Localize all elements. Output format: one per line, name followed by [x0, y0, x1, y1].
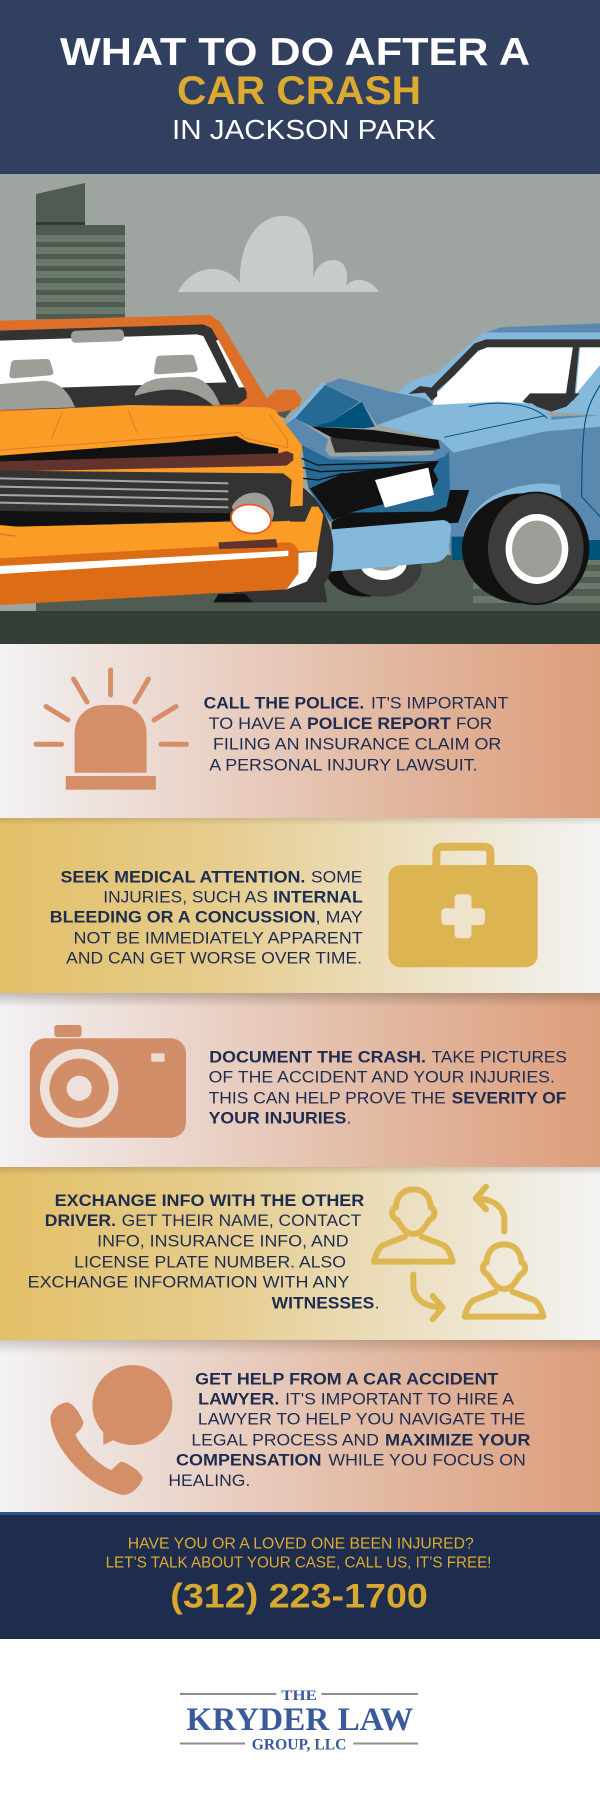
text: exchange info: GET THEIR NAME, CONTACT — [122, 1211, 361, 1230]
text: seek medical attention: INTERNAL — [273, 888, 363, 907]
text: get help from a lawyer: LEGAL PROCESS AND — [191, 1430, 379, 1449]
subtitle: in jackson park: IN JACKSON PARK — [172, 114, 436, 145]
logo: the kryder law group: THE — [281, 1688, 317, 1704]
text: call the police: POLICE REPORT — [307, 714, 451, 733]
call to action panel — [0, 1512, 600, 1639]
text: exchange info: . — [375, 1293, 380, 1312]
panel: call the police — [0, 644, 600, 818]
icon: first aid kit — [388, 847, 538, 967]
text: call the police: A PERSONAL INJURY LAWSUIT. — [209, 755, 478, 774]
text: call the police: CALL THE POLICE. — [204, 693, 364, 712]
text: document the crash: DOCUMENT THE CRASH. — [209, 1047, 426, 1066]
title: car crash: CAR CRASH — [177, 69, 421, 113]
text: get help from a lawyer: LAWYER. — [198, 1389, 279, 1408]
building left — [36, 183, 125, 325]
text: seek medical attention: SEEK MEDICAL ATTENTION. — [60, 867, 305, 886]
text: exchange info: LICENSE PLATE NUMBER. ALSO — [74, 1252, 346, 1271]
text: document the crash: TAKE PICTURES — [432, 1047, 567, 1066]
text: document the crash: . — [346, 1108, 351, 1127]
text: exchange info: WITNESSES — [272, 1293, 374, 1312]
icon: siren — [36, 670, 186, 790]
panel: seek medical attention — [0, 818, 600, 993]
text: exchange info: EXCHANGE INFORMATION WITH ANY — [28, 1272, 349, 1291]
icon: two people exchanging — [374, 1187, 543, 1319]
orange car — [0, 315, 333, 605]
text: exchange info: INFO, INSURANCE INFO, AND — [97, 1232, 349, 1251]
panel: exchange info — [0, 1167, 600, 1340]
text: exchange info: DRIVER. — [45, 1211, 116, 1230]
cta invitation text: LET’S TALK ABOUT YOUR CASE, CALL US, IT’S FREE! — [106, 1554, 491, 1571]
text: exchange info: EXCHANGE INFO WITH THE OTHER — [55, 1191, 364, 1210]
icon: person two — [465, 1244, 543, 1317]
logo: the kryder law group: GROUP, LLC — [252, 1737, 346, 1754]
title: what to do after a: WHAT TO DO AFTER A — [60, 31, 530, 74]
text: get help from a lawyer: WHILE YOU FOCUS ON — [328, 1450, 526, 1469]
text: get help from a lawyer: COMPENSATION — [176, 1450, 322, 1469]
text: get help from a lawyer: GET HELP FROM A CAR ACCIDENT — [195, 1369, 499, 1388]
blue car body — [379, 323, 600, 605]
text: get help from a lawyer: HEALING. — [168, 1471, 250, 1490]
cloud — [178, 216, 379, 292]
text: seek medical attention — [50, 867, 363, 967]
text: get help from a lawyer — [168, 1369, 530, 1490]
text: call the police: IT'S IMPORTANT — [371, 693, 508, 712]
text: document the crash: SEVERITY OF — [452, 1088, 566, 1107]
text: seek medical attention: SOME — [311, 867, 362, 886]
text: call the police — [204, 693, 508, 774]
phone number: (312) 223-1700 — [170, 1578, 428, 1616]
text: get help from a lawyer: LAWYER TO HELP YOU NAVIGATE THE — [198, 1409, 525, 1428]
icon: camera — [30, 1025, 186, 1138]
logo: the kryder law group: KRYDER LAW — [186, 1702, 413, 1738]
text: document the crash: OF THE ACCIDENT AND YOUR INJURIES. — [209, 1067, 555, 1086]
text: get help from a lawyer: MAXIMIZE YOUR — [385, 1430, 530, 1449]
text: seek medical attention: , MAY — [316, 908, 363, 927]
panel: get help from a lawyer — [0, 1340, 600, 1513]
road and ground — [0, 555, 600, 644]
text: get help from a lawyer: IT'S IMPORTANT TO HIRE A — [285, 1389, 515, 1408]
icon: arrow up-left — [476, 1187, 504, 1232]
header panel — [0, 0, 600, 174]
text: seek medical attention: AND CAN GET WORSE OVER TIME. — [66, 948, 362, 967]
crash illustration — [0, 174, 600, 644]
cta question text: HAVE YOU OR A LOVED ONE BEEN INJURED? — [128, 1535, 474, 1552]
text: call the police: TO HAVE A — [209, 714, 302, 733]
text: document the crash: YOUR INJURIES — [209, 1108, 346, 1127]
icon: phone with speech bubble — [50, 1365, 172, 1495]
text: document the crash: THIS CAN HELP PROVE THE — [209, 1088, 446, 1107]
text: exchange info — [28, 1191, 380, 1312]
text: call the police: FOR — [456, 714, 492, 733]
panel: document the crash — [0, 993, 600, 1167]
text: seek medical attention: BLEEDING OR A CONCUSSION — [50, 908, 316, 927]
text: call the police: FILING AN INSURANCE CLAIM OR — [213, 734, 501, 753]
logo: the kryder law group — [180, 1688, 418, 1754]
icon: arrow down-right — [413, 1274, 443, 1319]
text: seek medical attention: INJURIES, SUCH AS — [103, 888, 268, 907]
text: seek medical attention: NOT BE IMMEDIATELY APPARENT — [74, 928, 363, 947]
blue car crumpled front — [285, 378, 469, 597]
text: document the crash — [209, 1047, 567, 1127]
icon: person one — [374, 1189, 453, 1262]
